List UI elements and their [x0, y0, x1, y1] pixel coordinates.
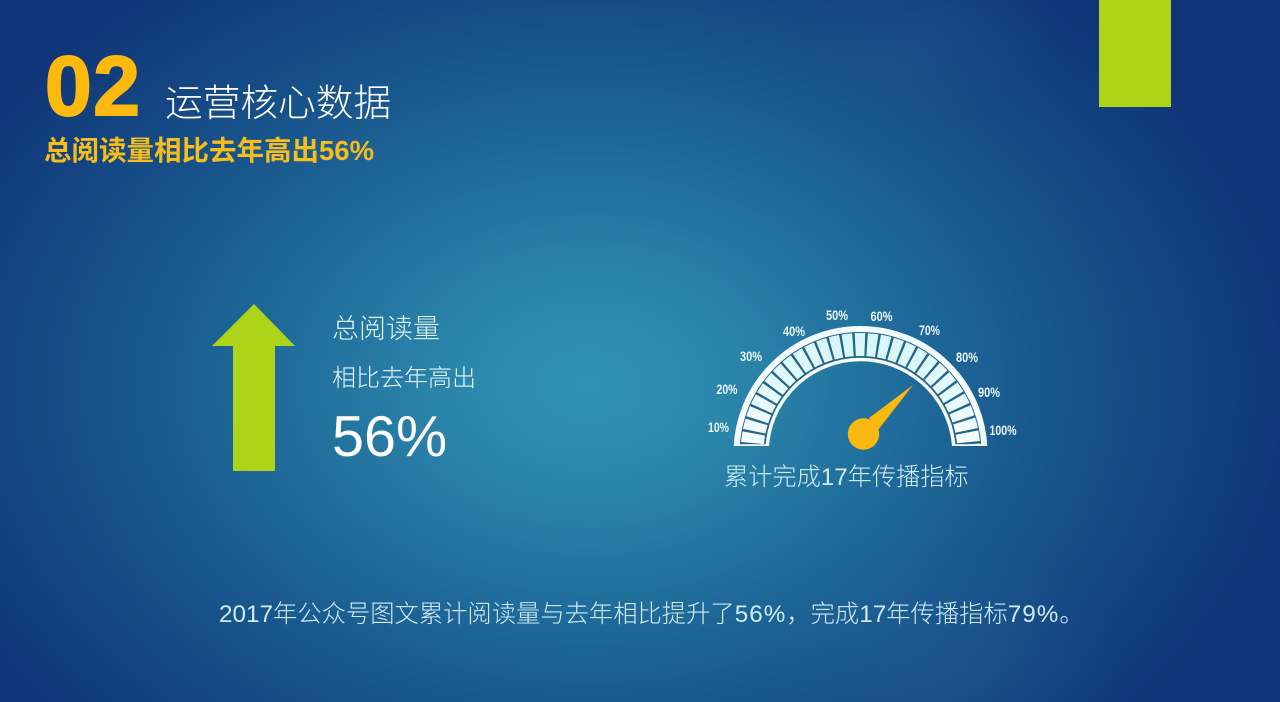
gauge scale labels: 100%: [990, 423, 1016, 438]
gauge caption: 累计完成17年传播指标: [724, 464, 969, 491]
gauge scale labels: 30%: [740, 349, 762, 364]
icon: up arrow: [212, 304, 295, 471]
gauge scale labels: 60%: [870, 309, 892, 324]
gauge scale labels: 40%: [783, 324, 805, 339]
gauge scale labels: 20%: [716, 382, 738, 397]
gauge scale labels: 90%: [978, 385, 1000, 400]
label: total reads: 总阅读量: [332, 314, 440, 344]
needle: [848, 385, 913, 450]
gauge scale labels: 70%: [919, 323, 940, 338]
stat: 56%: 56%: [332, 405, 447, 469]
gauge chart: [708, 308, 1016, 450]
gauge scale labels: 50%: [826, 308, 848, 323]
subtitle: 总阅读量相比去年高出56%: [44, 135, 374, 166]
gauge scale labels: 80%: [956, 350, 978, 365]
green corner tab: [1099, 0, 1171, 107]
gauge scale labels: [708, 308, 1016, 438]
label: compared to last year: 相比去年高出: [332, 365, 476, 392]
title: 运营核心数据: [165, 82, 391, 124]
section number: 02: [45, 39, 141, 133]
gauge scale labels: 10%: [708, 420, 729, 435]
footer summary: 2017年公众号图文累计阅读量与去年相比提升了56%，完成17年传播指标79%。: [219, 601, 1084, 628]
